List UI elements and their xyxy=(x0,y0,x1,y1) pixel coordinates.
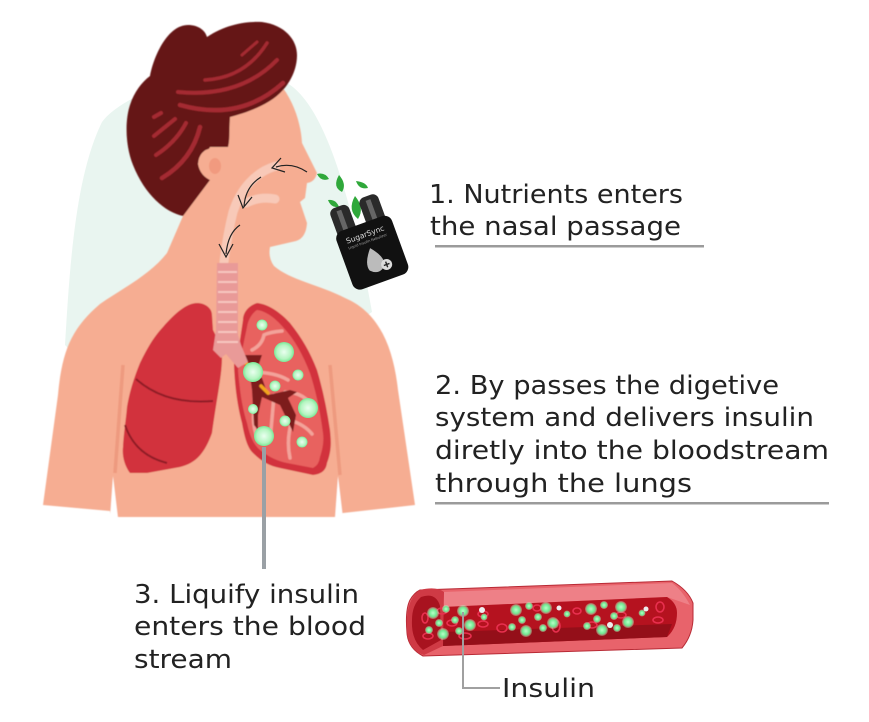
left lung xyxy=(123,303,222,473)
device body xyxy=(334,213,411,292)
step 1 text: 1. Nutrients enters xyxy=(429,180,683,210)
vessel opening xyxy=(407,588,444,655)
blood vessel xyxy=(406,581,693,656)
product: nasal device xyxy=(326,191,411,292)
step 3 text: 3. Liquify insulin xyxy=(134,580,359,610)
trachea xyxy=(213,263,248,368)
step 3 text xyxy=(134,580,366,675)
step 3 text: enters the blood xyxy=(134,612,366,642)
step 2 text: through the lungs xyxy=(435,469,692,499)
arm lines xyxy=(115,365,340,475)
insulin particles xyxy=(425,601,646,640)
insulin bubbles in lung xyxy=(243,320,318,448)
step 1 text: the nasal passage xyxy=(430,212,681,242)
lumen xyxy=(443,597,677,646)
background blob xyxy=(65,73,372,360)
ear xyxy=(198,148,226,181)
hair strands xyxy=(154,42,283,178)
device drop icon xyxy=(362,245,387,275)
leaves xyxy=(317,174,368,219)
airflow arrows xyxy=(219,158,307,257)
insulin callout xyxy=(463,612,595,704)
step 1 text xyxy=(429,180,704,248)
step 2 text: 2. By passes the digetive xyxy=(435,371,779,401)
product: nasal device: Liquid Insulin Nebulizer xyxy=(348,233,388,250)
insulin callout: Insulin xyxy=(502,674,595,704)
step 2 text: system and delivers insulin xyxy=(435,403,814,433)
body and face xyxy=(43,88,415,517)
right lung xyxy=(234,303,331,475)
step 2 text: diretly into the bloodstream xyxy=(435,436,829,466)
hair xyxy=(127,22,297,216)
nozzles xyxy=(329,203,359,242)
step 2 text xyxy=(435,371,829,504)
device label: SugarSync xyxy=(345,223,385,246)
vessel wall xyxy=(406,581,693,656)
nasal passage xyxy=(224,166,276,262)
armpit notches xyxy=(110,476,343,518)
bronchi xyxy=(250,331,315,458)
figure xyxy=(43,22,415,518)
step 3 text: stream xyxy=(134,645,232,675)
connector line to step 3 xyxy=(262,447,266,569)
red cells xyxy=(422,602,664,639)
